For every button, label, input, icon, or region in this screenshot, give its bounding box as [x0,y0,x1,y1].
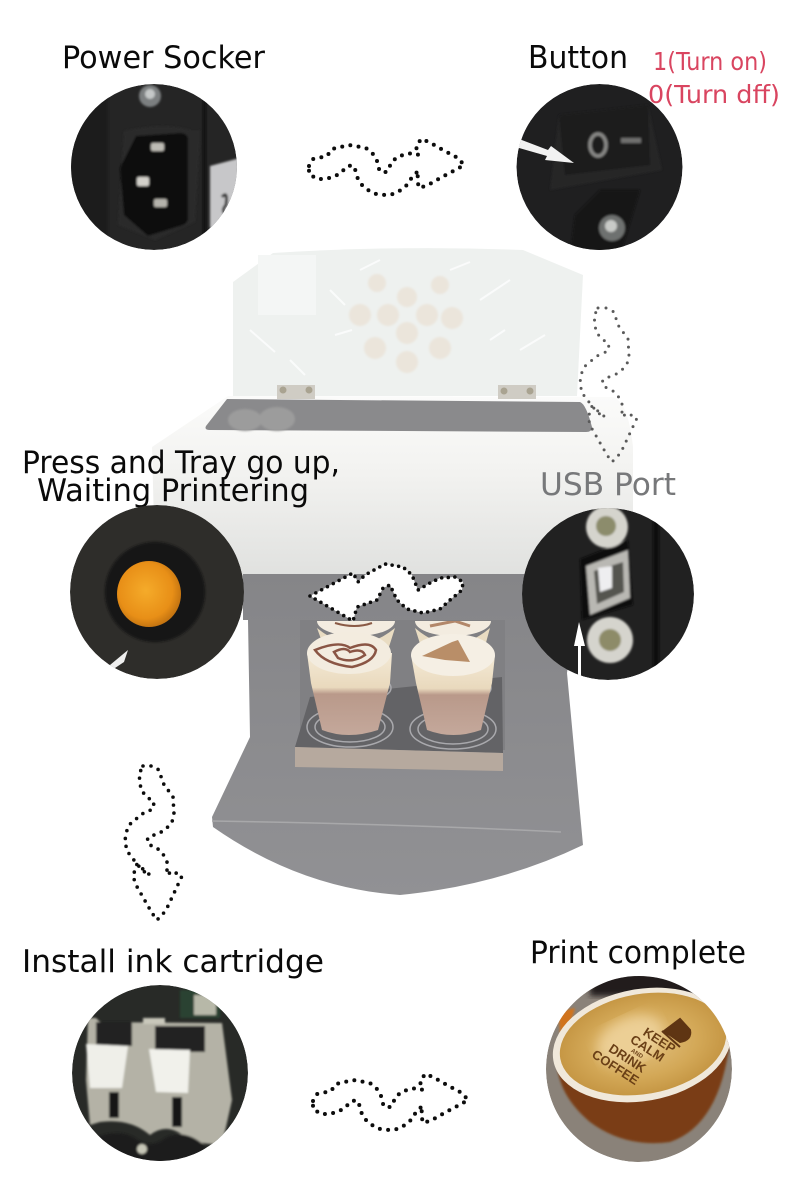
hinges [277,385,536,399]
machine upper body [152,396,633,600]
arrow: tray button to ink cartridge [125,766,182,920]
front left cup [307,632,392,735]
photo: ink cartridge [72,985,248,1170]
arrow: button to USB [580,308,637,462]
heart latte art [315,644,376,667]
heading: press and tray [22,445,340,509]
arrow: USB to tray button [310,564,463,621]
photo: power button [512,84,682,255]
latte lettering: CALM [628,1032,667,1065]
latte lettering: DRINK [606,1041,649,1076]
photo: power socket [70,84,240,254]
heading: USB port: USB Port [540,467,676,503]
heading: press and tray: Waiting Printering [37,473,309,509]
lid reflections [250,260,545,375]
machine illustration [152,248,633,895]
note: switch positions: 1(Turn on) [653,47,767,76]
base crease [212,821,561,832]
back cups [317,621,491,646]
note: switch positions: 0(Turn dff) [648,80,780,109]
tree latte art [422,640,470,662]
front right cup [411,634,495,735]
arrow inside button photo [519,140,574,163]
photo: USB port [522,505,694,685]
photo: finished coffee [544,970,740,1162]
print chamber [300,620,505,750]
note: switch positions [648,47,780,109]
heading: button: Button [528,40,628,76]
heading: print complete: Print complete [530,935,746,971]
arrow: ink cartridge to print complete [313,1074,468,1130]
heading: install ink cartridge: Install ink cartridge [22,944,324,980]
top window [206,399,592,432]
heading: press and tray: Press and Tray go up, [22,445,340,481]
tray [295,674,503,771]
latte lettering: COFFEE [589,1047,642,1088]
machine lower housing and base [212,574,583,895]
latte lettering [592,1027,676,1085]
latte lettering: KEEP [641,1024,679,1056]
arrow inside USB photo [574,622,585,680]
latte cup icon [662,1019,690,1047]
latte lettering: AND [629,1048,644,1061]
machine lid [233,248,583,396]
photo: tray button [70,505,244,679]
arrow: socket to button [309,139,464,195]
heading: power socket: Power Socker [62,40,265,76]
